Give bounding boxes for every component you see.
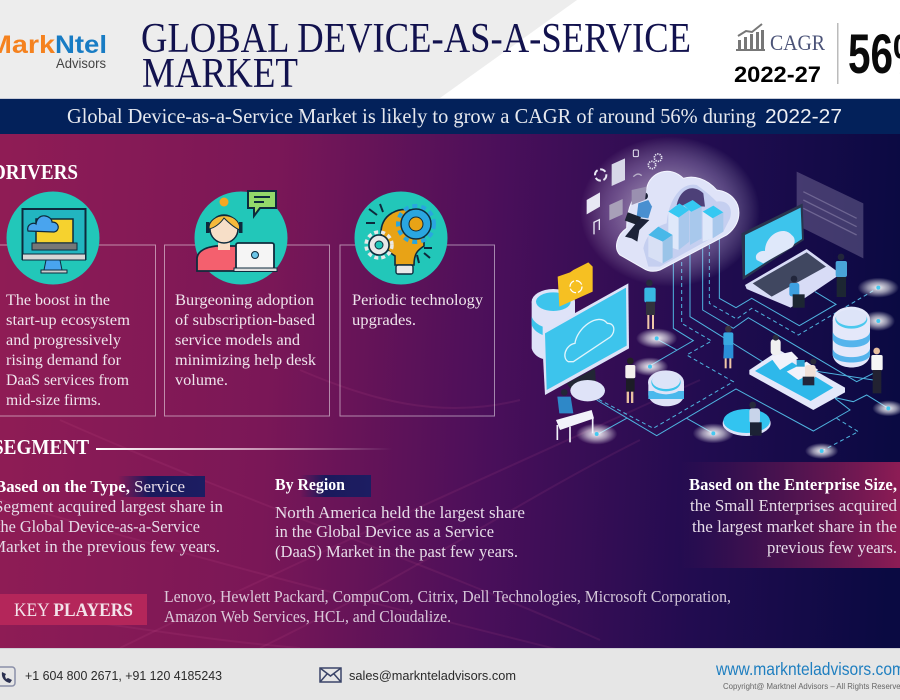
phone with workers: [749, 335, 845, 410]
text block: start-up ecosystem: [6, 312, 131, 329]
main panel background: [0, 134, 900, 650]
segment: enterprise size: [680, 462, 900, 568]
header background: [0, 0, 900, 98]
text block: service models and: [175, 332, 300, 349]
ghost data panel: [797, 172, 863, 258]
text block: The boost in the: [6, 292, 110, 309]
segment: type: [0, 476, 223, 556]
text block: Burgeoning adoption: [175, 292, 314, 309]
segment: type: the Global Device-as-a-Service: [0, 517, 200, 536]
people: [556, 254, 883, 442]
logo: MarkNtel Advisors: Advisors: [56, 56, 106, 71]
text block: upgrades.: [352, 312, 416, 329]
title: [141, 16, 691, 97]
text block: [175, 292, 316, 389]
logo: MarkNtel Advisors: [0, 31, 107, 71]
title: GLOBAL DEVICE-AS-A-SERVICE: [141, 16, 691, 62]
segment: region: [275, 475, 525, 561]
icon: mail: [320, 668, 341, 682]
key players list: Lenovo, Hewlett Packard, CompuCom, Citrix, Dell Technologies, Microsoft Corporation,: [164, 587, 731, 606]
CAGR label: CAGR: [770, 30, 825, 55]
period: 2022-27: [734, 62, 821, 87]
key players list: Amazon Web Services, HCL, and Cloudalize.: [164, 607, 451, 626]
icon: phone: [0, 667, 15, 686]
network lines: [597, 238, 888, 436]
key players: [0, 587, 731, 626]
text block: and progressively: [6, 332, 121, 349]
database left: [532, 262, 593, 359]
database right: [833, 307, 870, 367]
text block: [6, 292, 131, 409]
disc: [723, 402, 771, 436]
panel: driver 1: [0, 192, 156, 416]
text block: Periodic technology: [352, 292, 483, 309]
logo: MarkNtel Advisors: Ntel: [55, 31, 107, 59]
segment: type: Segment acquired largest share in: [0, 497, 223, 516]
segment: region: North America held the largest share: [275, 503, 525, 522]
text block: DaaS services from: [6, 372, 130, 389]
text block: mid-size firms.: [6, 392, 101, 409]
segment: enterprise size: the Small Enterprises acquired: [690, 496, 898, 515]
monitor: [542, 283, 629, 401]
segment: region: in the Global Device as a Service: [275, 522, 494, 541]
summary band: Global Device-as-a-Service Market is likely to grow a CAGR of around 56% during: [67, 104, 756, 128]
text block: minimizing help desk: [175, 352, 316, 369]
segment: enterprise size: Based on the Enterprise Size,: [689, 475, 897, 494]
cloud servers: [580, 137, 760, 287]
segment: type: Service: [134, 477, 185, 496]
footer: [0, 648, 900, 700]
floating icons: [587, 150, 662, 234]
summary band: 2022-27: [765, 106, 842, 128]
database center: [648, 370, 684, 406]
segment: enterprise size: the largest market share in the: [692, 517, 897, 536]
panel: driver 3: [340, 192, 494, 416]
segment: region: (DaaS) Market in the past few years.: [275, 542, 518, 561]
glow nodes: [576, 278, 900, 459]
illustration: cloud network: [532, 137, 900, 459]
key players label: [0, 594, 147, 625]
icon: bulb and gears: [354, 192, 448, 284]
segment: enterprise size: previous few years.: [767, 538, 897, 557]
panel: driver 2: [164, 191, 330, 416]
title: MARKET: [142, 51, 298, 97]
text block: rising demand for: [6, 352, 122, 369]
person on cloud: [625, 192, 652, 242]
email: sales@marknteladvisors.com: [349, 668, 516, 683]
key players list: [164, 587, 731, 626]
text block: volume.: [175, 372, 228, 389]
segment: region: By Region: [275, 475, 345, 494]
icon: growth bars: [736, 24, 765, 51]
summary band: [0, 98, 900, 134]
phone numbers: +1 604 800 2671, +91 120 4185243: [25, 668, 222, 683]
icon: cloud monitor: [6, 192, 100, 284]
key players label: KEY PLAYERS: [14, 600, 133, 621]
text block: [352, 292, 483, 329]
laptop: [741, 203, 837, 308]
text block: of subscription-based: [175, 312, 315, 329]
icon: support agent: [194, 191, 288, 284]
CAGR block: [734, 22, 900, 87]
